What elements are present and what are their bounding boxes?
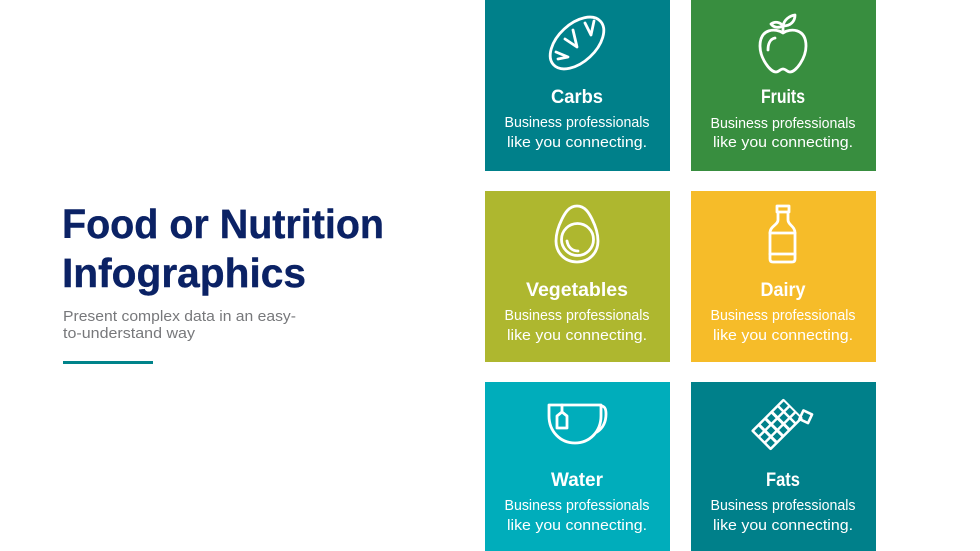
subtitle: to-understand way [63,325,196,342]
panel: fruits [691,0,876,171]
heading: dairy: Dairy [760,280,806,301]
subtitle [63,308,296,342]
text: fruits description [710,116,856,151]
text: carbs description [504,115,650,151]
text: dairy description: Business professionals [710,308,856,324]
accent bar [63,361,153,364]
text: water description: Business professionals [504,498,650,514]
panel: carbs [485,0,670,171]
heading: fruits: Fruits [761,87,805,108]
heading: carbs: Carbs [551,87,603,108]
text: vegetables description: like you connecting. [507,328,647,344]
text: fruits description: Business professionals [710,116,856,132]
text: carbs description: Business professionals [504,115,650,131]
heading: vegetables: Vegetables [526,280,628,301]
text: dairy description: like you connecting. [713,328,853,344]
text: dairy description [710,308,856,344]
icon: bottle [770,206,795,262]
icon: chocolate bar [751,398,812,451]
icon: avocado [556,206,598,262]
text: water description [504,498,650,534]
title: Infographics [62,250,306,296]
icon: apple [760,15,806,72]
panel: water [485,382,670,551]
heading: water: Water [551,470,604,491]
icon: bread [541,7,613,79]
title [62,201,384,296]
text: fats description [710,498,856,534]
text: water description: like you connecting. [507,518,647,534]
text: fats description: Business professionals [710,498,856,514]
text: carbs description: like you connecting. [507,135,647,151]
heading: fats: Fats [766,470,800,491]
text: vegetables description [504,308,650,344]
icon: tea cup [549,405,606,443]
text: fats description: like you connecting. [713,518,853,534]
panel: dairy [691,191,876,362]
text: vegetables description: Business professionals [504,308,650,324]
title: Food or Nutrition [62,201,384,247]
text: fruits description: like you connecting. [713,135,853,151]
panel: vegetables [485,191,670,362]
subtitle: Present complex data in an easy- [63,308,296,325]
panel: fats [691,382,876,551]
